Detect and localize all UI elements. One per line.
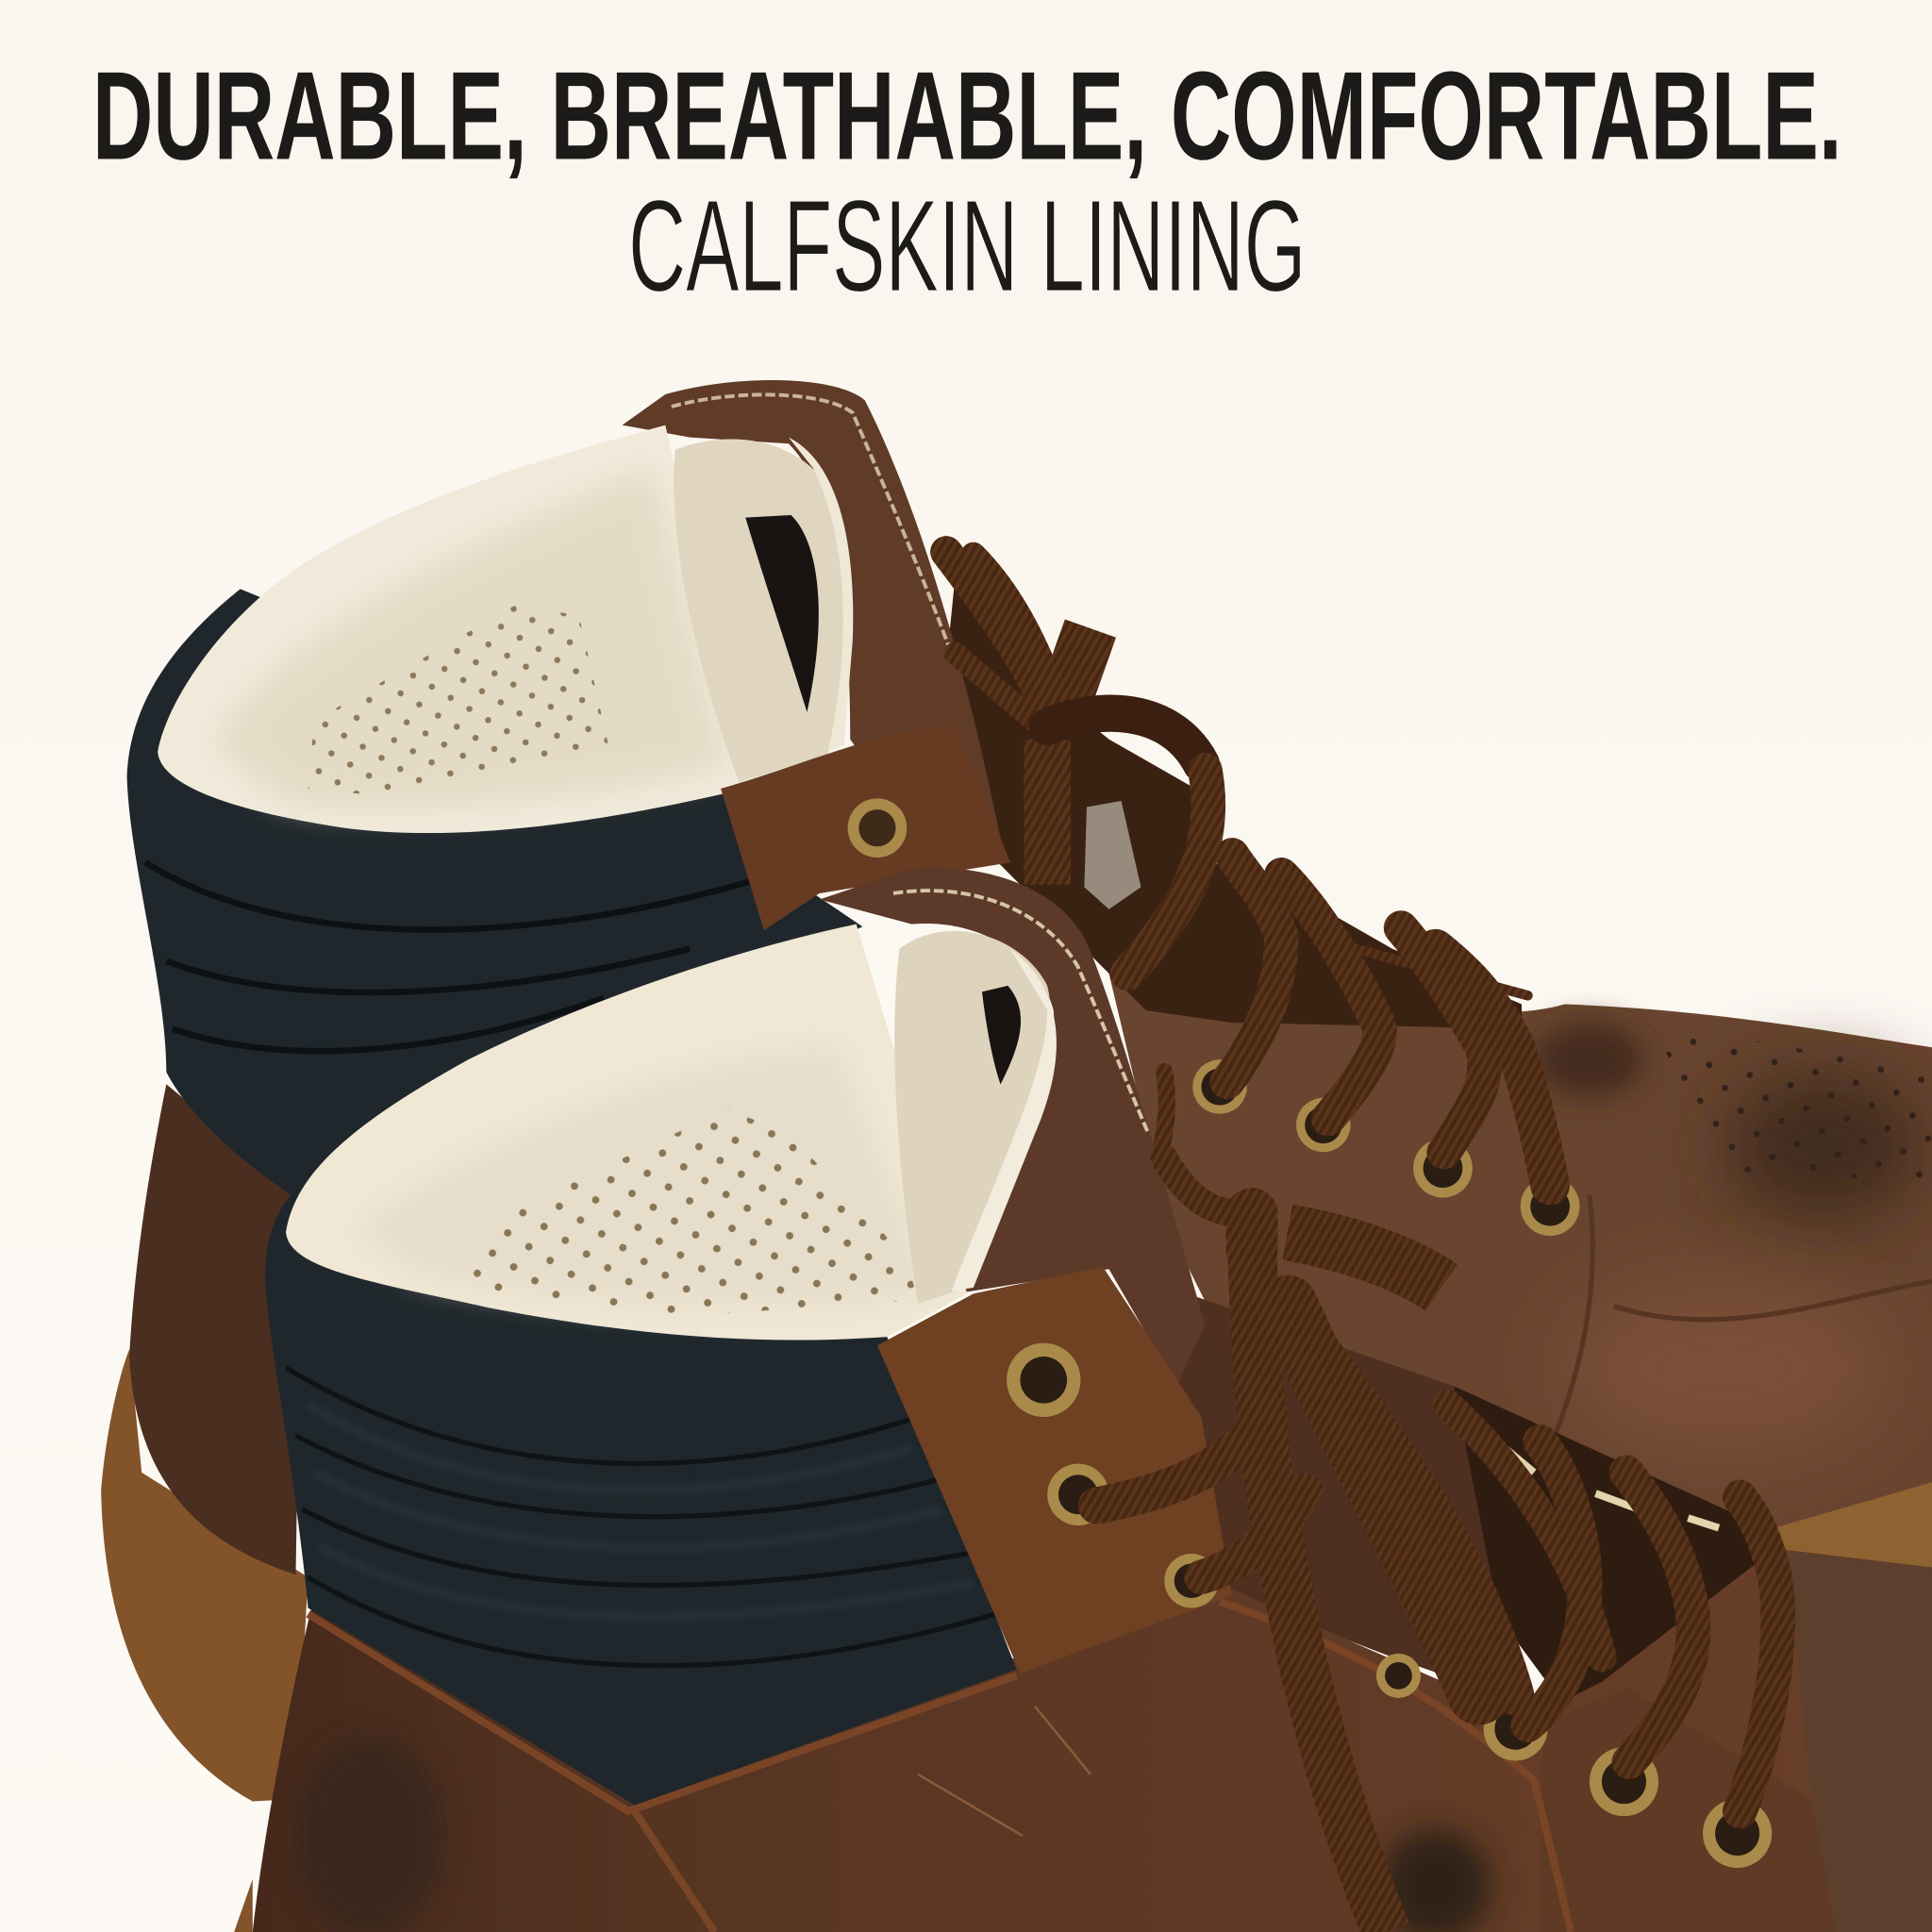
cream lace tabs xyxy=(1497,1441,1719,1528)
perforation dots xyxy=(443,1109,918,1316)
back boot eyelet flap xyxy=(721,724,1010,930)
photo: pair of brown leather boots xyxy=(101,380,1932,1932)
back boot tongue xyxy=(623,380,1004,862)
front boot tongue area left of laces xyxy=(1152,1281,1516,1700)
front boot sole sliver xyxy=(1774,1482,1932,1567)
back boot calfskin lining xyxy=(158,425,745,833)
back boot heel upper xyxy=(129,1084,302,1574)
back boot grey tongue patch xyxy=(1084,801,1141,909)
front boot laces xyxy=(1096,1158,1778,1932)
front boot calfskin lining xyxy=(286,924,967,1341)
back boot inner tongue xyxy=(674,438,853,782)
back boot laces xyxy=(946,552,1550,1185)
back boot toe and vamp xyxy=(1109,974,1932,1530)
front boot lower eyelets xyxy=(1376,1654,1772,1868)
front boot lower upper xyxy=(253,1541,1932,1932)
back boot sole xyxy=(101,1349,308,1802)
front boot inner tongue xyxy=(894,931,1057,1304)
front boot bottom-left sole corner xyxy=(234,1879,253,1932)
back boot black padded collar xyxy=(127,589,862,1198)
dark gap behind front laces xyxy=(1454,1386,1787,1707)
dark lace mass background xyxy=(949,579,1522,1029)
front boot eyelet flap xyxy=(877,1267,1232,1674)
perforation dots xyxy=(308,604,610,794)
subtitle: CALFSKIN LINING xyxy=(628,174,1306,319)
front boot black padded collar xyxy=(265,1183,1017,1805)
eyelets xyxy=(1007,1343,1080,1417)
back boot eyelets xyxy=(1192,1059,1579,1236)
front boot outer tongue xyxy=(820,868,1205,1386)
